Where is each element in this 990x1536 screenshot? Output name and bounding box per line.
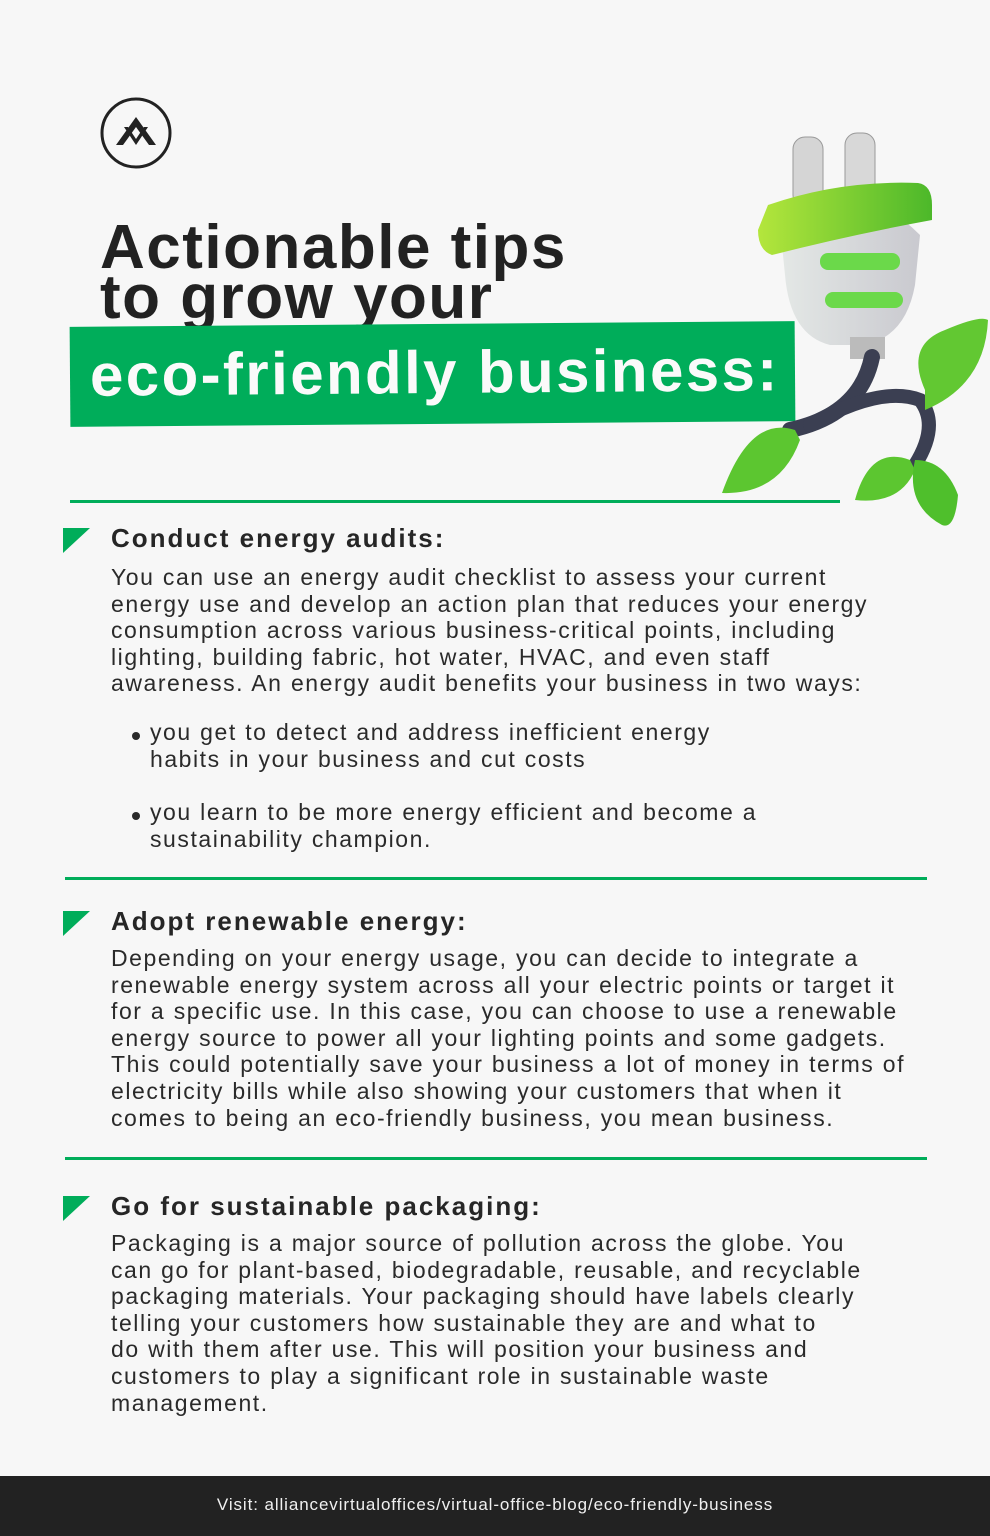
banner [70,321,795,427]
body text: do with them after use. This will position your business and [111,1336,808,1362]
body text: Packaging is a major source of pollution across the globe. You [111,1230,845,1256]
body text: for a specific use. In this case, you can choose to use a renewable [111,998,898,1024]
icon: plug with leaves [722,132,988,526]
footer: Visit: alliancevirtualoffices/virtual-office-blog/eco-friendly-business [217,1495,773,1514]
body text: renewable energy system across all your electric points or target it [111,972,895,998]
bullet list: you learn to be more energy efficient and become a [150,799,757,825]
body text: comes to being an eco-friendly business, you mean business. [111,1105,834,1131]
body text: management. [111,1390,269,1416]
banner: eco-friendly business: [90,336,780,409]
body text [111,564,868,696]
body text: electricity bills while also showing your customers that when it [111,1078,842,1104]
title [100,213,567,332]
body text: consumption across various business-critical points, including [111,617,836,643]
icon: triangle [63,528,90,553]
heading: Conduct energy audits: [111,523,445,553]
logo [100,98,172,168]
bullet list [132,719,757,852]
body text: energy source to power all your lighting points and some gadgets. [111,1025,887,1051]
body text [111,945,905,1131]
title: Actionable tips [100,213,567,282]
title: to grow your [100,263,493,332]
body text: lighting, building fabric, hot water, HVAC, and even staff [111,644,770,670]
heading: Adopt renewable energy: [111,906,468,936]
body text: Depending on your energy usage, you can decide to integrate a [111,945,859,971]
section: conduct energy audits [63,523,868,852]
bullet list: you get to detect and address inefficient energy [150,719,711,745]
body text [111,1230,862,1416]
bullet list: sustainability champion. [150,826,432,852]
body text: This could potentially save your business a lot of money in terms of [111,1051,905,1077]
bullet list: habits in your business and cut costs [150,746,586,772]
body text: awareness. An energy audit benefits your business in two ways: [111,670,862,696]
body text: energy use and develop an action plan that reduces your energy [111,591,868,617]
body text: can go for plant-based, biodegradable, reusable, and recyclable [111,1257,862,1283]
body text: customers to play a significant role in sustainable waste [111,1363,770,1389]
body text: packaging materials. Your packaging should have labels clearly [111,1283,855,1309]
section: sustainable packaging [63,1191,862,1416]
section: adopt renewable energy [63,906,905,1131]
body text: You can use an energy audit checklist to assess your current [111,564,827,590]
body text: telling your customers how sustainable they are and what to [111,1310,817,1336]
heading: Go for sustainable packaging: [111,1191,542,1221]
footer [0,1476,990,1536]
